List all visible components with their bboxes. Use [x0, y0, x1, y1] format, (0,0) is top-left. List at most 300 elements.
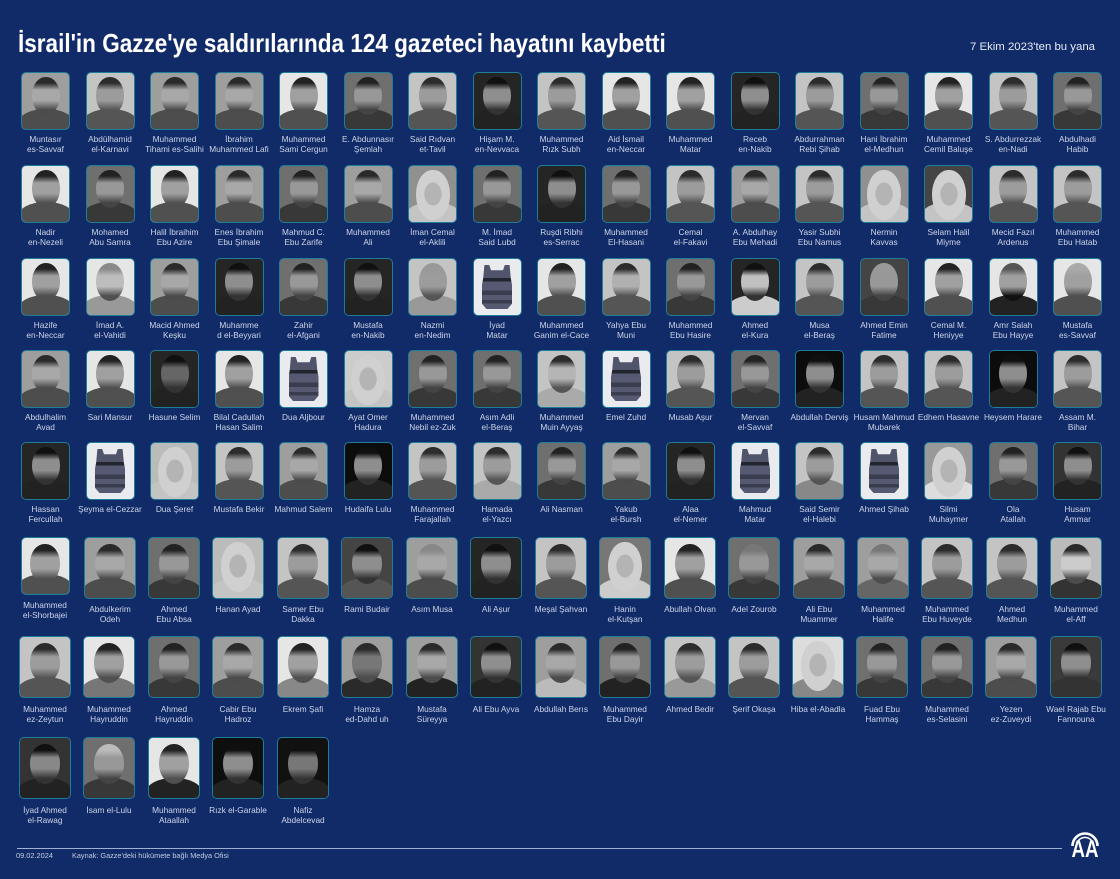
name	[985, 134, 1042, 154]
name: Meşal Şahvan	[535, 604, 587, 614]
card: Fuad Ebu Hammaş	[850, 636, 914, 728]
name: Fuad Ebu	[864, 704, 900, 714]
name: Silmi	[940, 504, 957, 514]
name: Nazmi	[421, 320, 444, 330]
card: Muhammed Rızk Subh	[537, 72, 586, 154]
portrait	[793, 537, 845, 599]
name: Mahmud	[739, 504, 771, 514]
name: Hazife	[34, 320, 57, 330]
card: Alaa el-Nemer	[658, 442, 722, 534]
portrait	[21, 72, 70, 130]
portrait	[988, 350, 1038, 408]
name: Ali	[363, 237, 373, 247]
name	[787, 604, 851, 625]
name: Hanan Ayad	[215, 604, 261, 614]
card: Abdulhalim Avad	[14, 350, 78, 442]
name	[336, 412, 400, 433]
card: Dua Aljbour	[272, 350, 336, 442]
name: İyad	[489, 320, 505, 330]
name: Muhammed	[1054, 604, 1098, 614]
portrait	[150, 442, 199, 500]
portrait	[1053, 442, 1102, 500]
card: Muhammed Farajallah	[400, 442, 464, 534]
card: Heysem Harare	[981, 350, 1045, 442]
card: İyad Matar	[465, 258, 529, 350]
name: d el-Beyyari	[217, 330, 261, 340]
date: 09.02.2024	[16, 851, 53, 860]
name: Mecid Fazıl	[992, 227, 1034, 237]
card: Mahmud C. Ebu Zarife	[272, 165, 336, 257]
card: Mustafa es-Savvaf	[1046, 258, 1110, 350]
card: Receb en-Nakib	[731, 72, 780, 154]
name: Hasune Selim	[149, 412, 200, 422]
card: Ahmed Emin Fatime	[852, 258, 916, 350]
portrait	[730, 258, 780, 316]
portrait	[1053, 165, 1102, 223]
name: İbrahim	[225, 134, 253, 144]
name	[272, 227, 336, 248]
portrait	[470, 537, 522, 599]
card: Muhammed Sami Cergun	[279, 72, 328, 154]
name	[342, 134, 394, 154]
portrait	[406, 537, 458, 599]
name: Fercullah	[28, 514, 63, 524]
name: el-Beraş	[804, 330, 835, 340]
card: Husam Mahmud Mubarek	[852, 350, 916, 442]
name	[852, 320, 916, 341]
name	[207, 227, 271, 248]
name: Muhammed	[411, 504, 454, 514]
portrait	[666, 258, 715, 316]
portrait	[1050, 537, 1102, 599]
name	[980, 604, 1044, 625]
name	[1046, 504, 1110, 525]
name: Abdullah Berıs	[534, 704, 588, 714]
portrait	[214, 165, 264, 223]
name: Cemal	[678, 227, 702, 237]
name: Şerif Okaşa	[732, 704, 776, 714]
card: Macid Ahmed Keşku	[142, 258, 206, 350]
name	[336, 320, 400, 341]
card: Amr Salah Ebu Hayye	[981, 258, 1045, 350]
name: Ebu Zarife	[284, 237, 323, 247]
card: Said Semir el-Halebi	[788, 442, 852, 534]
portrait	[537, 165, 586, 223]
name: Ebu Dayir	[607, 714, 643, 724]
name	[271, 805, 335, 826]
card: Mustafa en-Nakib	[336, 258, 400, 350]
name: Muhammed	[23, 600, 67, 610]
name: Muhamme	[219, 320, 259, 330]
card: Dua Şeref	[142, 442, 206, 534]
name: Muhammed	[152, 805, 196, 815]
portrait: press vest	[279, 350, 328, 408]
portrait	[408, 72, 457, 130]
name	[593, 704, 657, 725]
name: Receb	[743, 134, 767, 144]
name	[916, 320, 980, 341]
card: Abullah Olvan	[658, 537, 722, 629]
card: Said Rıdvan et-Tavil	[408, 72, 457, 154]
name: Nebil ez-Zuk	[409, 422, 456, 432]
portrait	[535, 537, 587, 599]
row 6 of portraits	[0, 537, 1120, 629]
card: Ali Ebu Ayva	[464, 636, 528, 728]
card: Muhammed Ebu Huveyde	[915, 537, 979, 629]
name: Muhammed	[669, 134, 712, 144]
name: Abdurrahman	[794, 134, 845, 144]
portrait	[148, 636, 200, 698]
card: Ekrem Şafi	[271, 636, 335, 728]
name: Sami Cergun	[279, 144, 328, 154]
portrait	[21, 165, 70, 223]
name: Mervan	[741, 412, 769, 422]
card: Hanin el-Kutşan	[593, 537, 657, 629]
name: Süreyya	[417, 714, 447, 724]
card: A. Abdulhay Ebu Mehadi	[723, 165, 787, 257]
name: Muhammed	[927, 134, 970, 144]
portrait	[406, 636, 458, 698]
name: Ekrem Şafi	[283, 704, 323, 714]
name: Hudaifa Lulu	[345, 504, 391, 514]
name: en-Nezeli	[28, 237, 63, 247]
card: Assam M. Bihar	[1046, 350, 1110, 442]
name: Rızk Subh	[542, 144, 581, 154]
name: Hayruddin	[90, 714, 128, 724]
name	[88, 134, 132, 154]
name	[465, 227, 529, 248]
name	[279, 134, 328, 154]
portrait	[83, 737, 135, 799]
name: Ebu Namus	[798, 237, 841, 247]
card: İbrahim Muhammed Lafi	[209, 72, 269, 154]
card: Abdülhamid el-Karnavi	[86, 72, 135, 154]
name	[530, 227, 594, 248]
card: Adel Zourob	[722, 537, 786, 629]
name	[410, 134, 455, 154]
name: Musab Aşur	[669, 412, 712, 422]
card: Yahya Ebu Muni	[594, 258, 658, 350]
name: en-Nedim	[415, 330, 450, 340]
name: Medhun	[997, 614, 1027, 624]
name: Muhammed	[411, 412, 454, 422]
card: Muhammed Ataallah	[142, 737, 206, 829]
name: ez-Zuveydi	[991, 714, 1031, 724]
portrait	[472, 442, 522, 500]
name	[788, 227, 852, 248]
name	[14, 412, 78, 433]
portrait	[860, 165, 908, 223]
card: Ola Atallah	[981, 442, 1045, 534]
portrait	[277, 537, 329, 599]
name: Nermin	[871, 227, 897, 237]
card: Muhammed Halife	[851, 537, 915, 629]
portrait	[924, 258, 973, 316]
name: Ahmed Bedir	[666, 704, 714, 714]
card: Musa el-Beraş	[788, 258, 852, 350]
name: Musa	[809, 320, 830, 330]
portrait	[599, 636, 651, 698]
name: Bilal Cadullah	[214, 412, 264, 422]
name: Said Semir	[799, 504, 840, 514]
name: Nafiz	[294, 805, 312, 815]
portrait	[985, 636, 1037, 698]
card: Samer Ebu Dakka	[271, 537, 335, 629]
card: Muhammed Ganim el-Cace	[530, 258, 594, 350]
portrait	[148, 537, 200, 599]
name: Ahmed Şihab	[859, 504, 909, 514]
name: el-Nemer	[673, 514, 708, 524]
name: Adel Zourob	[731, 604, 777, 614]
card: Sari Mansur	[78, 350, 142, 442]
row 8 of portraits	[0, 737, 340, 829]
portrait	[212, 636, 264, 698]
portrait	[472, 350, 522, 408]
name: Emel Zuhd	[606, 412, 646, 422]
name: el-Shorbajei	[23, 610, 67, 620]
name: Ebu Absa	[156, 614, 192, 624]
card: Muhammed es-Selasini	[915, 636, 979, 728]
name	[981, 227, 1045, 248]
name: Ganim el-Cace	[534, 330, 589, 340]
name: Atallah	[1000, 514, 1026, 524]
portrait	[664, 636, 716, 698]
card: Ruşdi Ribhi es-Serrac	[530, 165, 594, 257]
name	[142, 227, 206, 248]
portrait	[150, 350, 199, 408]
name: en-Neccar	[607, 144, 645, 154]
card: Ali Ebu Muammer	[787, 537, 851, 629]
name: el-Rawag	[27, 815, 63, 825]
card: Şeyma el-Cezzar	[78, 442, 142, 534]
name	[27, 134, 64, 154]
name	[723, 412, 787, 433]
row 2 of portraits	[21, 165, 1102, 247]
card: Muhammed Matar	[666, 72, 715, 154]
portrait: press vest	[86, 442, 134, 500]
portrait	[666, 350, 715, 408]
portrait	[728, 537, 780, 599]
card: Hiba el-Abadla	[786, 636, 850, 728]
name: Asım Adli	[480, 412, 514, 422]
portrait	[537, 442, 586, 500]
portrait	[344, 165, 392, 223]
name	[1044, 704, 1108, 725]
name: Husam Mahmud	[854, 412, 914, 422]
name	[13, 704, 77, 725]
name	[916, 227, 980, 248]
portrait	[344, 72, 392, 130]
name	[979, 704, 1043, 725]
name: Muhammed	[1056, 227, 1099, 237]
card: Hasune Selim	[142, 350, 206, 442]
name	[28, 227, 63, 247]
name: en-Nadi	[998, 144, 1028, 154]
name: Yakub	[615, 504, 637, 514]
name	[142, 805, 206, 826]
source: Kaynak: Gazze'deki hükümete bağlı Medya Ofisi	[72, 851, 229, 860]
name: Assam M.	[1059, 412, 1096, 422]
name: Ayat Omer	[348, 412, 388, 422]
card: Hamza ed-Dahd uh	[335, 636, 399, 728]
name: Fatime	[871, 330, 897, 340]
name: Abdulkerim	[89, 604, 131, 614]
portrait	[86, 165, 134, 223]
portrait	[214, 258, 264, 316]
name: Ali Ebu	[806, 604, 832, 614]
name: Matar	[744, 514, 766, 524]
card: Rızk el-Garable	[206, 737, 270, 829]
card: Nadir en-Nezeli	[21, 165, 70, 247]
portrait	[924, 165, 973, 223]
name: Zahir	[294, 320, 313, 330]
card: Muhammed Ali	[336, 165, 400, 257]
name: Abu Samra	[89, 237, 131, 247]
name: Ahmed	[161, 704, 187, 714]
name: Ebu Şimale	[218, 237, 260, 247]
name	[981, 320, 1045, 341]
name: Ebu Azire	[157, 237, 192, 247]
name	[788, 504, 852, 525]
row 3 of portraits	[0, 258, 1120, 350]
name: Ahmed Emin	[860, 320, 908, 330]
name	[78, 604, 142, 625]
name: Macid Ahmed	[149, 320, 200, 330]
name: Keşku	[163, 330, 186, 340]
name	[465, 320, 529, 341]
card: Cabir Ebu Hadroz	[206, 636, 270, 728]
portrait	[1050, 636, 1102, 698]
name: es-Savvaf	[27, 144, 64, 154]
card: E. Abdunnasır Şemlah	[342, 72, 394, 154]
card: Abdullah Derviş	[788, 350, 852, 442]
portrait	[988, 72, 1038, 130]
name: Hamza	[354, 704, 380, 714]
name: Ebu Hayye	[993, 330, 1033, 340]
portrait	[988, 442, 1038, 500]
portrait	[860, 72, 908, 130]
portrait	[214, 72, 264, 130]
portrait	[924, 350, 973, 408]
name: Muhammed	[669, 320, 712, 330]
portrait	[344, 258, 392, 316]
name	[924, 134, 973, 154]
name	[915, 604, 979, 625]
name	[738, 134, 772, 154]
name: Ebu Mehadi	[733, 237, 777, 247]
name	[465, 504, 529, 525]
name: Halil İbraihim	[151, 227, 198, 237]
name: Avad	[36, 422, 55, 432]
name	[851, 604, 915, 625]
name: Ebu Hasire	[670, 330, 711, 340]
card: Ali Aşur	[464, 537, 528, 629]
card: Yezen ez-Zuveydi	[979, 636, 1043, 728]
name: Muin Ayyaş	[540, 422, 583, 432]
name	[788, 320, 852, 341]
card: Meşal Şahvan	[529, 537, 593, 629]
portrait	[408, 442, 457, 500]
name: Ruşdi Ribhi	[540, 227, 583, 237]
name	[142, 604, 206, 625]
portrait	[84, 537, 136, 599]
card: Hassan Fercullah	[14, 442, 78, 534]
name	[14, 320, 78, 341]
card: Muhamme d el-Beyyari	[207, 258, 271, 350]
card: Ahmed Şihab	[852, 442, 916, 534]
card: Cemal M. Heniyye	[916, 258, 980, 350]
name: Said Rıdvan	[410, 134, 455, 144]
name: Muhammed	[540, 134, 583, 144]
portrait	[21, 350, 70, 408]
name: Habib	[1067, 144, 1088, 154]
card: Silmi Muhaymer	[916, 442, 980, 534]
card: Mervan el-Savvaf	[723, 350, 787, 442]
name	[400, 320, 464, 341]
portrait	[602, 72, 650, 130]
name	[1046, 412, 1110, 433]
name: Ataallah	[159, 815, 189, 825]
card: Muhammed Ebu Dayir	[593, 636, 657, 728]
name: Muhammed	[346, 227, 390, 237]
name: Hasan Salim	[215, 422, 263, 432]
name	[400, 412, 464, 433]
name: Dua Şeref	[156, 504, 193, 514]
name: el-Fakavi	[674, 237, 707, 247]
portrait	[86, 350, 134, 408]
name: Muhaymer	[929, 514, 968, 524]
name	[13, 600, 77, 621]
portrait	[664, 537, 716, 599]
name: Edhem Hasavne	[918, 412, 979, 422]
name: Muhammed	[603, 704, 647, 714]
card: S. Abdurrezzak en-Nadi	[985, 72, 1042, 154]
portrait	[83, 636, 135, 698]
portrait	[856, 636, 908, 698]
portrait: press vest	[472, 258, 522, 316]
name: Muhammed	[282, 134, 325, 144]
name	[272, 320, 336, 341]
name: Muhammed	[540, 412, 583, 422]
card: Hanan Ayad	[206, 537, 270, 629]
portrait	[19, 737, 71, 799]
name: el-Vahidi	[94, 330, 126, 340]
name: Tihami es-Salihi	[145, 144, 204, 154]
card: Bilal Cadullah Hasan Salim	[207, 350, 271, 442]
name: Heniyye	[934, 330, 963, 340]
name	[669, 134, 712, 154]
name: Abdulhadi	[1059, 134, 1096, 144]
name: es-Serrac	[544, 237, 579, 247]
name: Ali Ebu Ayva	[473, 704, 519, 714]
portrait	[986, 537, 1038, 599]
name: Aid İsmail	[608, 134, 644, 144]
name: Cemil Baluşe	[924, 144, 973, 154]
name: Matar	[680, 144, 701, 154]
card: İsam el-Lulu	[77, 737, 141, 829]
portrait	[344, 442, 392, 500]
portrait	[924, 72, 973, 130]
name	[530, 320, 594, 341]
name: en-Neccar	[26, 330, 65, 340]
name	[916, 504, 980, 525]
card: Rami Budair	[335, 537, 399, 629]
name: İmad A.	[96, 320, 124, 330]
name: Enes İbrahim	[215, 227, 263, 237]
card: Mohamed Abu Samra	[86, 165, 135, 247]
portrait	[408, 350, 457, 408]
name: Abdelcevad	[281, 815, 325, 825]
